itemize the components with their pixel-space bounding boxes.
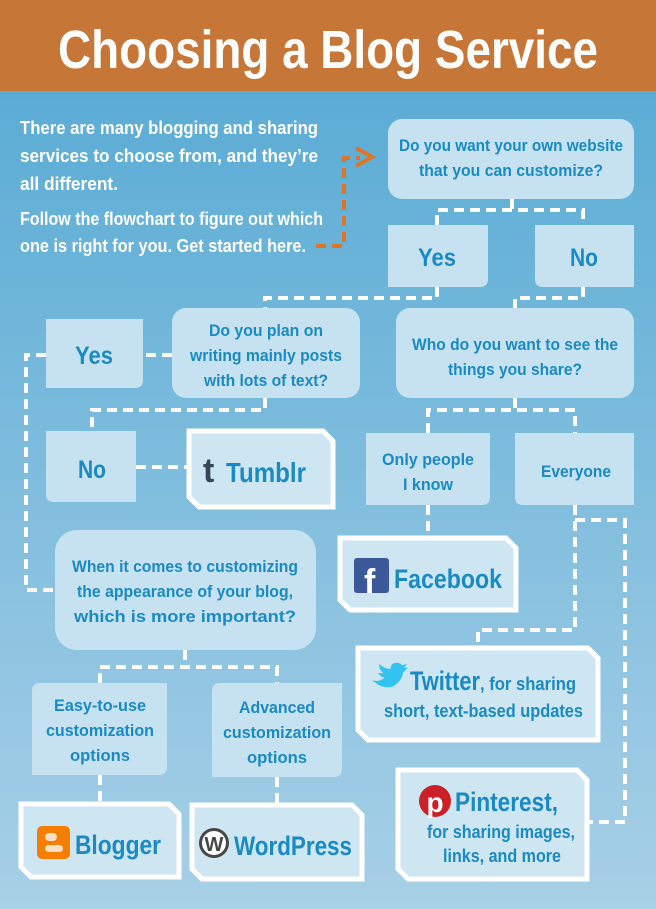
answer: easy <box>32 683 167 775</box>
result: wordpress: WordPress <box>234 831 352 861</box>
question: customizing: When it comes to customizing <box>72 557 298 576</box>
answer: everyone <box>515 433 634 505</box>
result: pinterest: for sharing images, <box>427 822 575 842</box>
question: mainly posts: writing mainly posts <box>189 346 342 365</box>
answer: advanced <box>212 683 342 777</box>
answer: no (posts): No <box>78 456 106 484</box>
result: tumblr: Tumblr <box>226 457 306 488</box>
question: mainly posts: with lots of text? <box>203 371 328 390</box>
icon: blogger <box>37 826 70 859</box>
intro text: services to choose from, and they’re <box>20 146 318 166</box>
answer: everyone: Everyone <box>541 462 611 481</box>
icon: facebook: f <box>364 563 376 601</box>
connectors <box>26 199 625 822</box>
answer: only people I know <box>366 433 490 505</box>
result: twitter: Twitter <box>410 666 480 696</box>
intro text: one is right for you. Get started here. <box>20 236 306 256</box>
result: twitter: short, text-based updates <box>384 701 583 721</box>
answer: yes (posts) <box>46 319 143 388</box>
result: blogger <box>21 804 179 877</box>
question: mainly posts: Do you plan on <box>209 321 323 340</box>
icon: facebook <box>354 558 389 601</box>
result: twitter: , for sharing <box>480 674 576 694</box>
answer: yes (website): Yes <box>418 244 456 272</box>
header band <box>0 0 656 91</box>
answer: easy: customization <box>46 721 154 740</box>
result: twitter <box>358 648 598 740</box>
answer: only people I know: Only people <box>382 450 474 469</box>
icon: tumblr t: t <box>203 452 214 490</box>
intro text <box>20 118 323 256</box>
answer: no (website) <box>535 225 634 287</box>
answer: only people I know: I know <box>403 475 454 494</box>
answer: easy: Easy-to-use <box>54 696 146 715</box>
result: pinterest <box>398 770 587 879</box>
result: facebook: Facebook <box>394 564 503 594</box>
result: blogger: Blogger <box>75 830 161 860</box>
question: who sees <box>396 308 634 398</box>
answer: no (website): No <box>570 244 598 272</box>
icon: twitter bird <box>372 663 408 687</box>
answer: advanced: options <box>247 748 307 767</box>
answer: yes (posts): Yes <box>75 342 113 370</box>
answer: advanced: customization <box>223 723 331 742</box>
result: tumblr <box>189 431 333 507</box>
result: pinterest: links, and more <box>443 846 561 866</box>
answer: no (posts) <box>46 431 136 502</box>
intro text: There are many blogging and sharing <box>20 118 318 138</box>
icon: pinterest <box>419 785 451 818</box>
question: who sees: Who do you want to see the <box>412 335 618 354</box>
icon: wordpress <box>199 828 229 858</box>
question: customizing <box>55 530 316 650</box>
intro text: Follow the flowchart to figure out which <box>20 209 323 229</box>
question: mainly posts <box>172 308 360 398</box>
answer: advanced: Advanced <box>239 698 315 717</box>
icon: wordpress: W <box>205 834 224 856</box>
question: own website: Do you want your own website <box>399 136 623 155</box>
question: own website <box>388 119 634 199</box>
answer: easy: options <box>70 746 130 765</box>
answer: yes (website) <box>388 225 488 287</box>
arrow: start <box>316 148 372 246</box>
result: pinterest: Pinterest, <box>455 787 558 817</box>
question: customizing: the appearance of your blog, <box>77 582 293 601</box>
question: who sees: things you share? <box>448 360 582 379</box>
intro text: all different. <box>20 174 118 194</box>
question: own website: that you can customize? <box>419 161 603 180</box>
result: wordpress <box>192 805 362 879</box>
icon: pinterest: p <box>426 787 444 818</box>
question: customizing: which is more important? <box>73 607 296 626</box>
result: facebook <box>340 538 516 610</box>
